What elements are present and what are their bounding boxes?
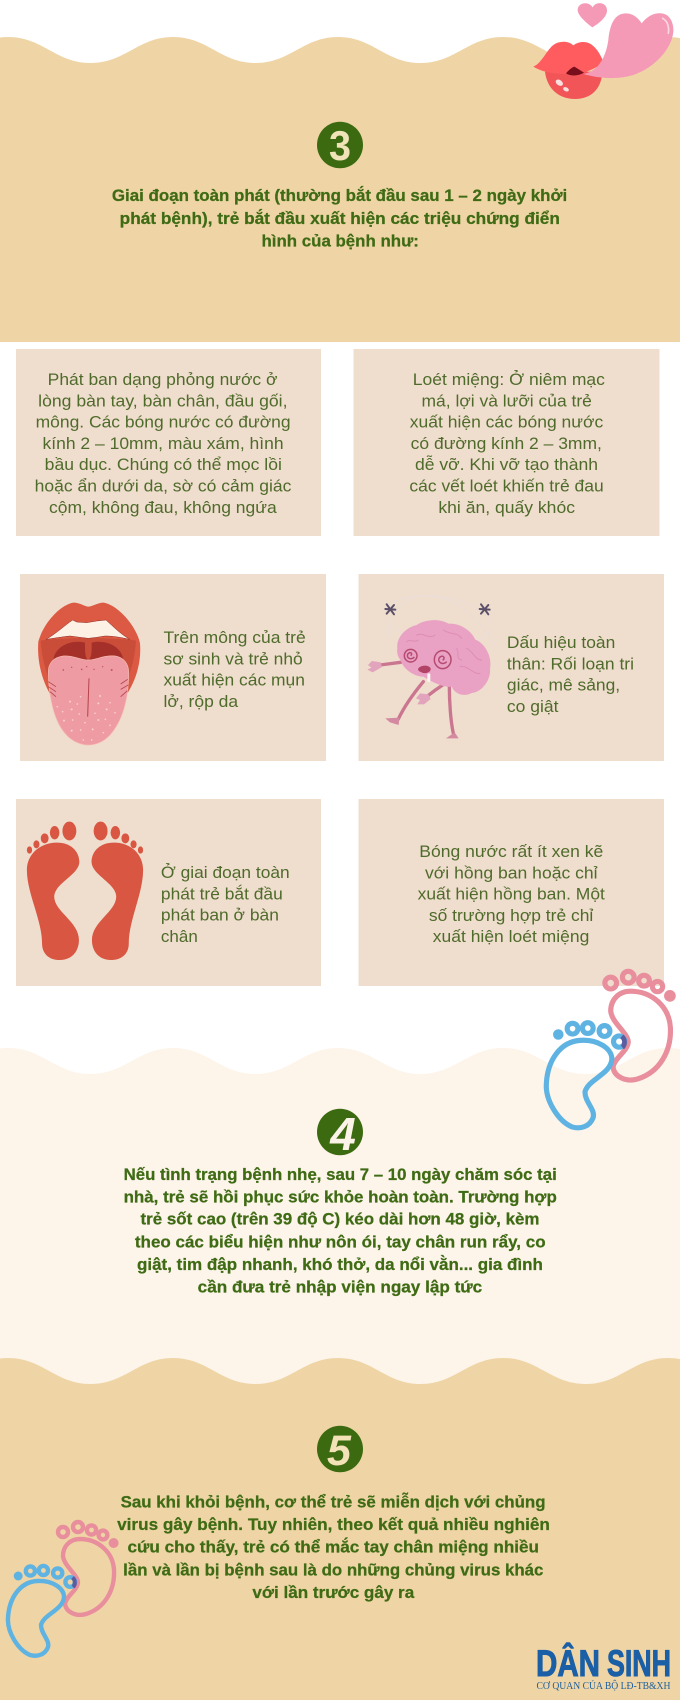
text block: section 5: cứu cho thấy, trẻ có thể mắc tay chân miệng nhiều: [128, 1538, 539, 1557]
panel: rash card: [16, 349, 321, 536]
text block: foot rash: [161, 863, 290, 946]
icon: number 4 badge: 4: [329, 1108, 356, 1160]
text block: buttocks rash: Trên mông của trẻ: [164, 628, 306, 647]
panel: feet card: [16, 799, 321, 986]
panel: tongue card: [20, 574, 326, 761]
text block: section 5: với lần trước gây ra: [252, 1584, 415, 1602]
text block: section 4: trẻ sốt cao (trên 39 độ C) kéo dài hơn 48 giờ, kèm: [140, 1211, 540, 1229]
panel: blister card: với hồng ban hoặc chỉ: [425, 863, 598, 882]
panel: brain card: [359, 574, 664, 761]
panel: section 3 background: [0, 37, 680, 342]
icon: number 4 badge: [317, 1108, 363, 1160]
panel: section 5 background: [0, 1358, 680, 1700]
icon: baby footprints lower left: [8, 1522, 119, 1656]
text block: foot rash: Ở giai đoạn toàn: [161, 863, 290, 882]
panel: blister card: [359, 799, 664, 986]
text block: section 5: virus gây bệnh. Tuy nhiên, theo kết quả nhiều nghiên: [117, 1516, 550, 1534]
panel: mouth ulcer card: má, lợi và lưỡi của trẻ: [422, 391, 592, 410]
panel: rash card: bầu dục. Chúng có thể mọc lồi: [45, 455, 282, 474]
text block: section 5: [117, 1492, 550, 1602]
text block: foot rash: phát trẻ bắt đầu: [161, 884, 283, 903]
panel: mouth ulcer card: dễ vỡ. Khi vỡ tạo thành: [415, 455, 598, 474]
panel: rash card: mông. Các bóng nước có đường: [36, 413, 291, 432]
text block: buttocks rash: sơ sinh và trẻ nhỏ: [164, 649, 303, 668]
text block: section 4: [124, 1166, 557, 1297]
text block: section 5: Sau khi khỏi bệnh, cơ thể trẻ sẽ miễn dịch với chủng: [121, 1492, 546, 1511]
icon: number 3 badge: 3: [329, 122, 351, 169]
text block: section 5: lần và lần bị bệnh sau là do những chủng virus khác: [123, 1561, 543, 1579]
logo: Dân Sinh: [536, 1642, 671, 1692]
text block: section 3 intro: Giai đoạn toàn phát (thường bắt đầu sau 1 – 2 ngày khởi: [112, 186, 567, 205]
text block: systemic signs: giác, mê sảng,: [507, 676, 620, 695]
text block: systemic signs: thân: Rối loạn tri: [507, 654, 634, 673]
text block: section 3 intro: hình của bệnh như:: [262, 233, 419, 251]
text block: buttocks rash: lở, rộp da: [164, 692, 239, 711]
text block: systemic signs: [507, 633, 634, 716]
panel: rash card: lòng bàn tay, bàn chân, đầu gối,: [38, 391, 288, 410]
panel: section 4 background: [0, 1048, 680, 1400]
logo: Dân Sinh: DÂN: [536, 1642, 600, 1684]
panel: mouth ulcer card: có đường kính 2 – 3mm,: [411, 434, 602, 453]
panel: mouth ulcer card: khi ăn, quấy khóc: [438, 498, 576, 517]
icon: kissing lips and hearts: [533, 3, 673, 99]
panel: blister card: xuất hiện hồng ban. Một: [418, 885, 605, 904]
icon: baby footprints upper right: [546, 971, 676, 1128]
panel: mouth ulcer card: [354, 349, 660, 536]
text block: section 3 intro: phát bệnh), trẻ bắt đầu xuất hiện các triệu chứng điển: [120, 209, 560, 228]
text block: section 3 intro: [112, 186, 567, 251]
text block: section 4: giật, tim đập nhanh, khó thở, da nổi vằn... gia đình: [137, 1255, 543, 1274]
text block: systemic signs: co giật: [507, 697, 559, 716]
text block: section 4: nhà, trẻ sẽ hồi phục sức khỏe hoàn toàn. Trường hợp: [124, 1188, 557, 1206]
icon: red footprints: [27, 822, 143, 960]
panel: rash card: cộm, không đau, không ngứa: [49, 498, 277, 517]
text block: foot rash: phát ban ở bàn: [161, 906, 279, 925]
panel: rash card: Phát ban dạng phỏng nước ở: [48, 370, 278, 389]
icon: open mouth with tongue: [38, 603, 140, 745]
panel: blister card: xuất hiện loét miệng: [433, 927, 589, 946]
icon: dizzy brain: [367, 589, 497, 738]
text block: section 4: theo các biểu hiện như nôn ói, tay chân run rẩy, co: [135, 1234, 546, 1252]
panel: mouth ulcer card: Loét miệng: Ở niêm mạc: [413, 370, 605, 389]
text block: buttocks rash: xuất hiện các mụn: [164, 671, 305, 690]
panel: rash card: kính 2 – 10mm, màu xám, hình: [42, 434, 284, 453]
panel: blister card: số trường hợp trẻ chỉ: [429, 906, 594, 925]
icon: number 5 badge: 5: [327, 1427, 352, 1475]
panel: mouth ulcer card: các vết loét khiến trẻ đau: [409, 476, 604, 496]
logo: Dân Sinh: CƠ QUAN CỦA BỘ LĐ-TB&XH: [536, 1680, 671, 1692]
icon: number 5 badge: [317, 1426, 363, 1475]
panel: rash card: hoặc ẩn dưới da, sờ có cảm giác: [35, 476, 292, 496]
text block: buttocks rash: [164, 628, 306, 711]
text block: systemic signs: Dấu hiệu toàn: [507, 633, 615, 652]
text block: section 4: cần đưa trẻ nhập viện ngay lập tức: [198, 1279, 482, 1297]
text block: foot rash: chân: [161, 927, 198, 946]
panel: mouth ulcer card: xuất hiện các bóng nước: [410, 413, 604, 432]
panel: blister card: Bóng nước rất ít xen kẽ: [419, 842, 603, 861]
text block: section 4: Nếu tình trạng bệnh nhẹ, sau 7 – 10 ngày chăm sóc tại: [124, 1166, 557, 1184]
icon: number 3 badge: [317, 122, 363, 169]
